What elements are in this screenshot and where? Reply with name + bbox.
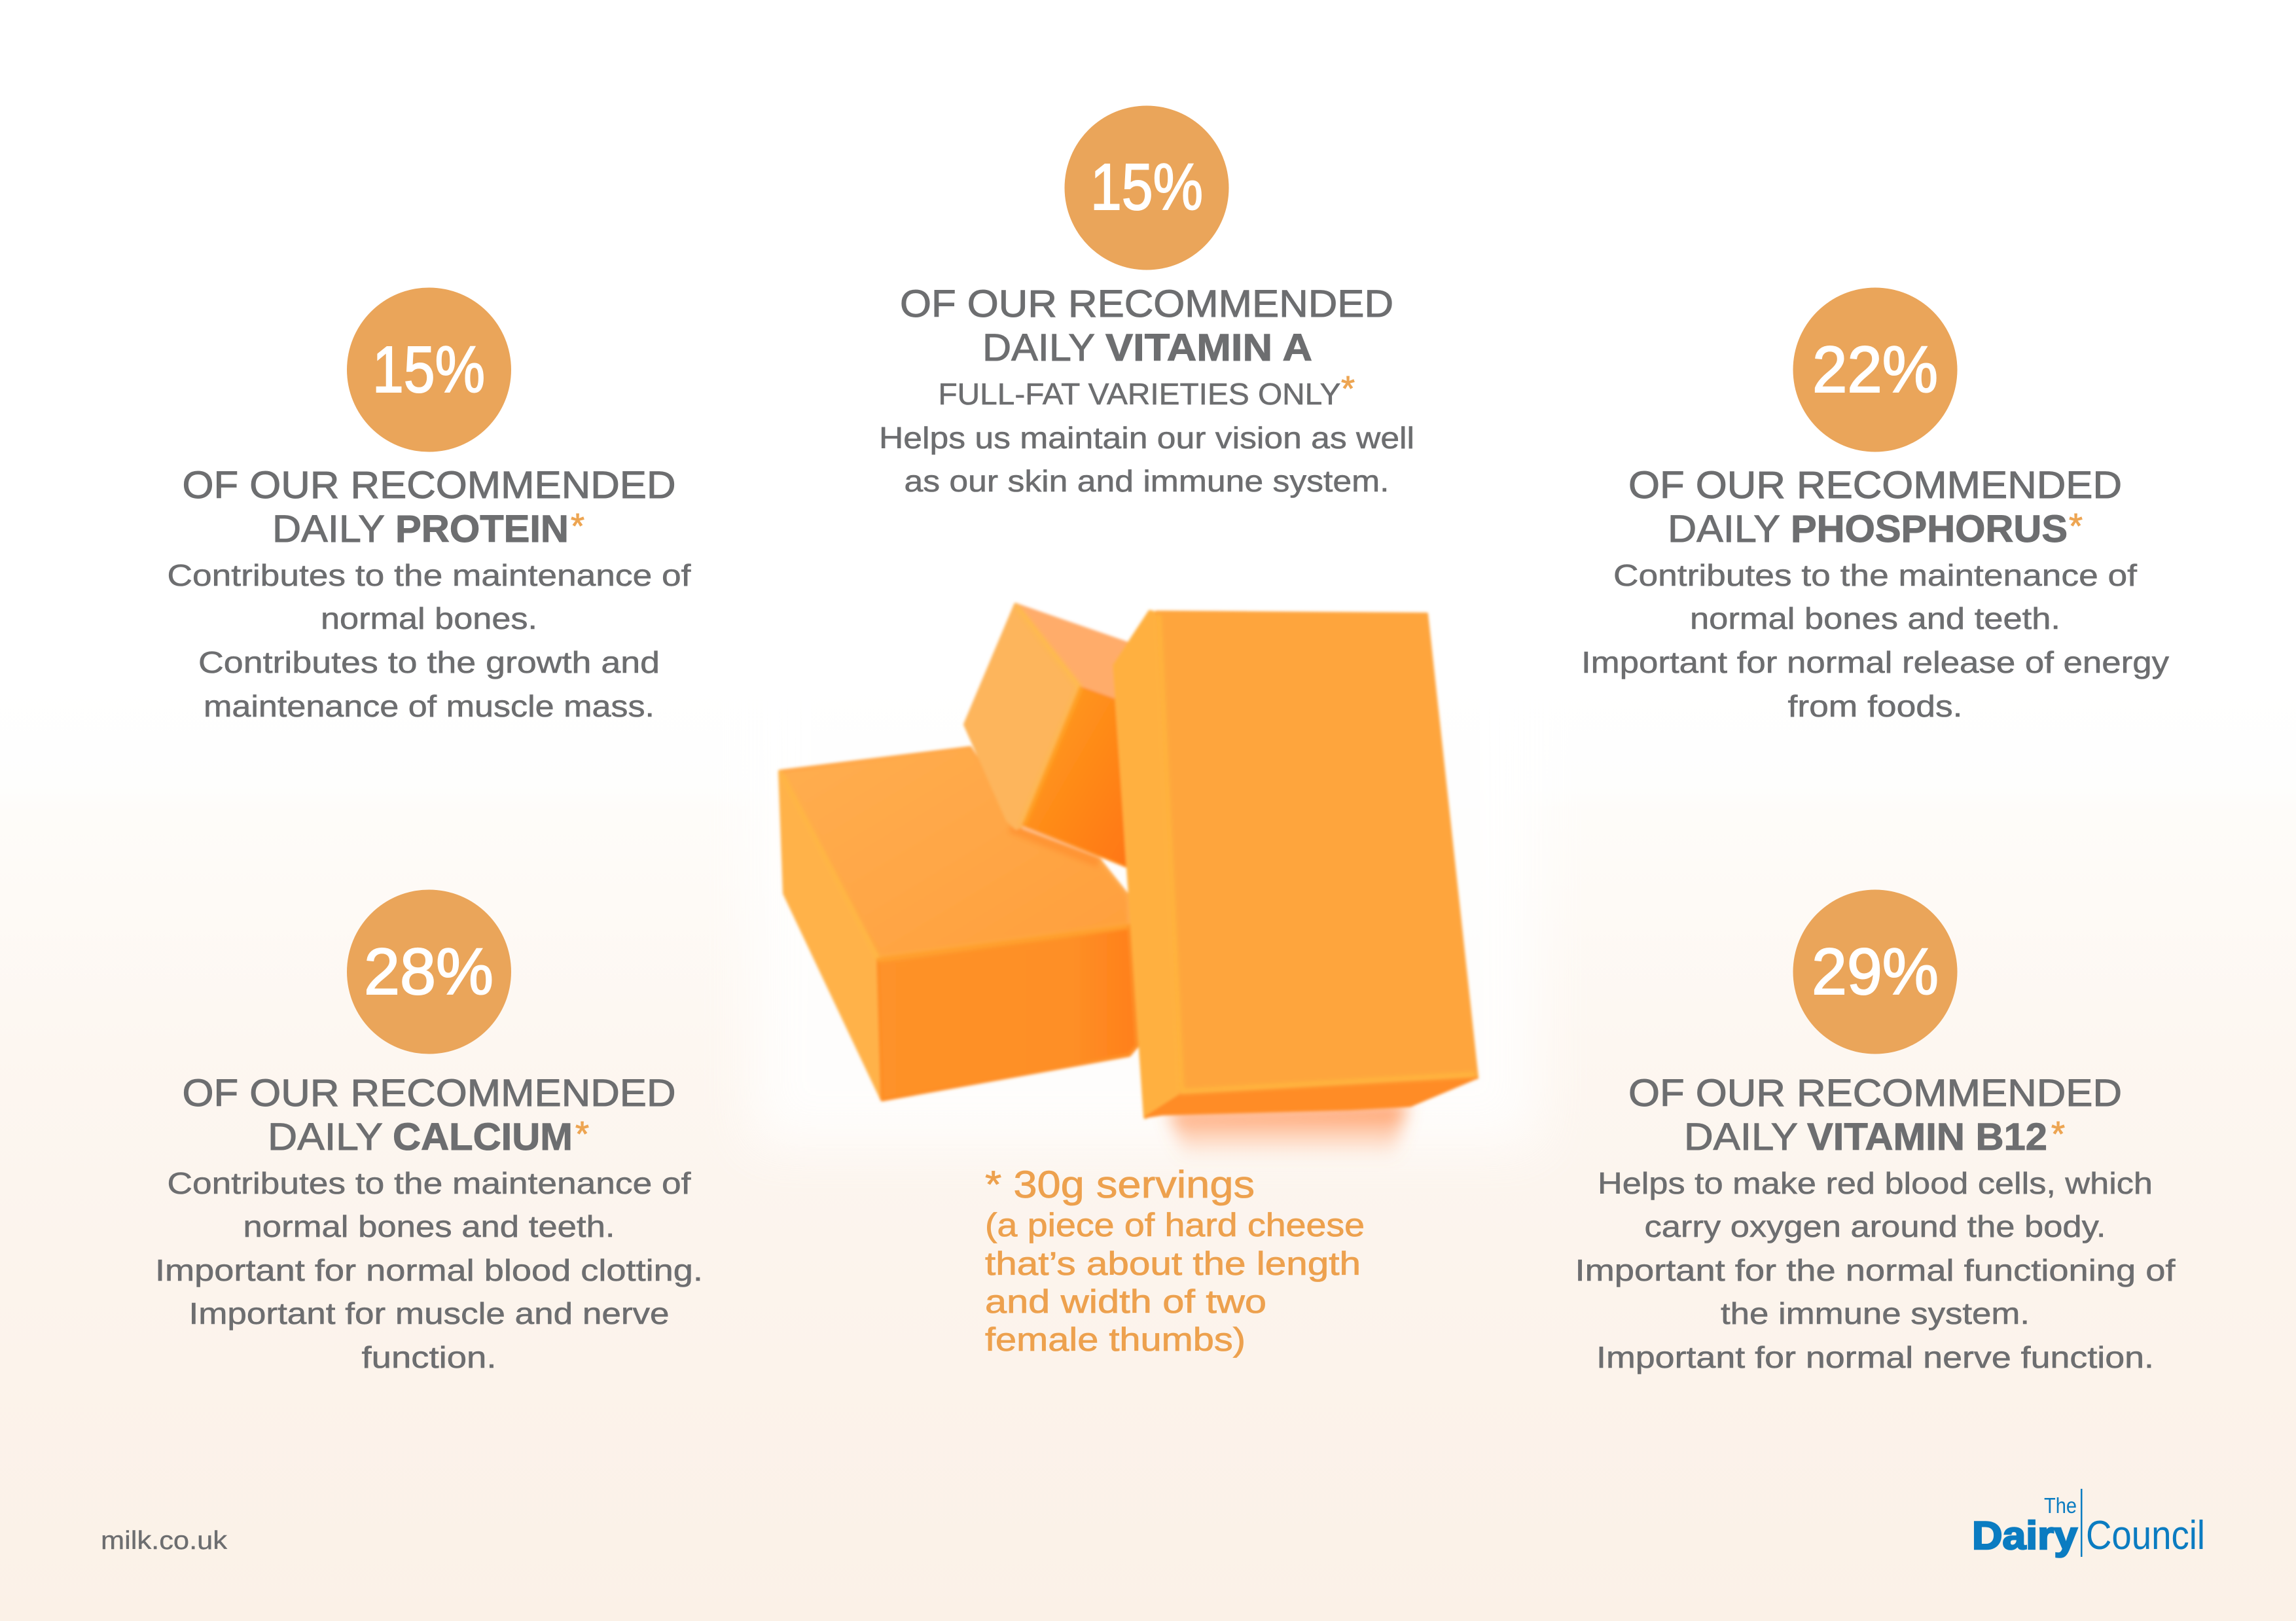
- text: phosphorus benefits: Contributes to the maintenance of: [1613, 558, 2137, 592]
- heading: protein: [182, 464, 675, 550]
- logo: The Dairy Council: The: [2044, 1493, 2077, 1518]
- heading: phosphorus: *: [2069, 507, 2083, 546]
- text: phosphorus benefits: Important for normal release of energy: [1581, 645, 2169, 679]
- text: protein benefits: [168, 558, 691, 723]
- badge: 15%: 15%: [1090, 151, 1203, 224]
- badge: 28%: [347, 890, 511, 1054]
- text: protein benefits: normal bones.: [321, 601, 537, 635]
- footnote: 30g servings: [985, 1164, 1365, 1358]
- text: phosphorus benefits: [1581, 558, 2169, 723]
- heading: calcium: DAILY: [268, 1116, 383, 1158]
- text: calcium benefits: Important for normal blood clotting.: [155, 1253, 703, 1287]
- text: vitamin B12 benefits: Important for the normal functioning of: [1575, 1253, 2176, 1287]
- panel: vitamin A: [879, 106, 1414, 498]
- image: three blocks of cheddar cheese: [780, 605, 1477, 1158]
- heading: vitamin B12: OF OUR RECOMMENDED: [1628, 1072, 2122, 1114]
- heading: calcium: *: [575, 1114, 589, 1154]
- heading: vitamin A: DAILY: [982, 327, 1095, 369]
- panel: phosphorus: [1581, 288, 2169, 723]
- footnote: 30g servings: female thumbs): [985, 1321, 1246, 1358]
- badge: 28%: 28%: [364, 935, 493, 1008]
- heading: vitamin A: OF OUR RECOMMENDED: [900, 283, 1393, 325]
- heading: calcium: CALCIUM: [393, 1116, 573, 1158]
- heading: phosphorus: [1628, 464, 2122, 550]
- heading: protein: DAILY: [272, 508, 385, 550]
- text: vitamin B12 benefits: the immune system.: [1721, 1296, 2030, 1330]
- badge: 29%: 29%: [1812, 935, 1939, 1008]
- badge: 15%: [347, 288, 511, 452]
- heading: vitamin B12: [1628, 1072, 2122, 1158]
- badge: 15%: 15%: [372, 333, 485, 406]
- heading: vitamin B12: DAILY: [1684, 1116, 1798, 1158]
- logo: The Dairy Council: Dairy: [1972, 1514, 2078, 1558]
- heading: vitamin A: FULL-FAT VARIETIES ONLY: [939, 377, 1340, 411]
- website address: milk.co.uk: [101, 1527, 228, 1555]
- heading: protein: *: [571, 507, 584, 546]
- heading: vitamin A: *: [1341, 369, 1355, 408]
- panel: protein: [168, 288, 691, 723]
- text: calcium benefits: Contributes to the maintenance of: [168, 1166, 691, 1200]
- text: vitamin A benefits: Helps us maintain our vision as well: [879, 421, 1414, 455]
- heading: calcium: [182, 1072, 675, 1158]
- text: phosphorus benefits: from foods.: [1788, 689, 1962, 723]
- text: calcium benefits: normal bones and teeth.: [243, 1209, 615, 1243]
- text: protein benefits: Contributes to the growth and: [198, 645, 660, 679]
- heading: phosphorus: PHOSPHORUS: [1791, 508, 2068, 550]
- footnote: 30g servings: (a piece of hard cheese: [985, 1207, 1365, 1243]
- text: vitamin B12 benefits: carry oxygen around the body.: [1644, 1209, 2106, 1243]
- text: protein benefits: maintenance of muscle mass.: [204, 689, 655, 723]
- badge: 29%: [1793, 890, 1957, 1054]
- heading: vitamin B12: VITAMIN B12: [1807, 1116, 2047, 1158]
- heading: vitamin A: VITAMIN A: [1105, 327, 1312, 369]
- heading: protein: PROTEIN: [395, 508, 569, 550]
- footnote: 30g servings: and width of two: [985, 1283, 1266, 1320]
- logo: The Dairy Council: Council: [2086, 1513, 2205, 1558]
- text: phosphorus benefits: normal bones and teeth.: [1690, 601, 2060, 635]
- panel: calcium: [155, 890, 703, 1374]
- text: protein benefits: Contributes to the maintenance of: [168, 558, 691, 592]
- text: vitamin B12 benefits: Important for normal nerve function.: [1596, 1340, 2154, 1374]
- text: calcium benefits: [155, 1166, 703, 1374]
- heading: phosphorus: OF OUR RECOMMENDED: [1628, 464, 2122, 507]
- badge: 22%: 22%: [1812, 333, 1938, 406]
- heading: calcium: OF OUR RECOMMENDED: [182, 1072, 675, 1114]
- text: vitamin B12 benefits: Helps to make red blood cells, which: [1598, 1166, 2153, 1200]
- badge: 22%: [1793, 288, 1957, 452]
- text: calcium benefits: Important for muscle and nerve: [188, 1296, 669, 1330]
- heading: phosphorus: DAILY: [1668, 508, 1780, 550]
- footnote: 30g servings: * 30g servings: [985, 1164, 1255, 1206]
- footnote: 30g servings: that’s about the length: [985, 1245, 1361, 1282]
- text: vitamin A benefits: as our skin and immune system.: [905, 464, 1389, 498]
- badge: 15%: [1064, 106, 1229, 270]
- logo: The Dairy Council: [1972, 1489, 2205, 1558]
- heading: vitamin B12: *: [2051, 1114, 2065, 1154]
- text: vitamin B12 benefits: [1575, 1166, 2176, 1374]
- text: vitamin A benefits: [879, 421, 1414, 498]
- text: calcium benefits: function.: [361, 1340, 496, 1374]
- panel: vitamin B12: [1575, 890, 2176, 1374]
- heading: vitamin A: [900, 283, 1393, 411]
- heading: protein: OF OUR RECOMMENDED: [182, 464, 675, 507]
